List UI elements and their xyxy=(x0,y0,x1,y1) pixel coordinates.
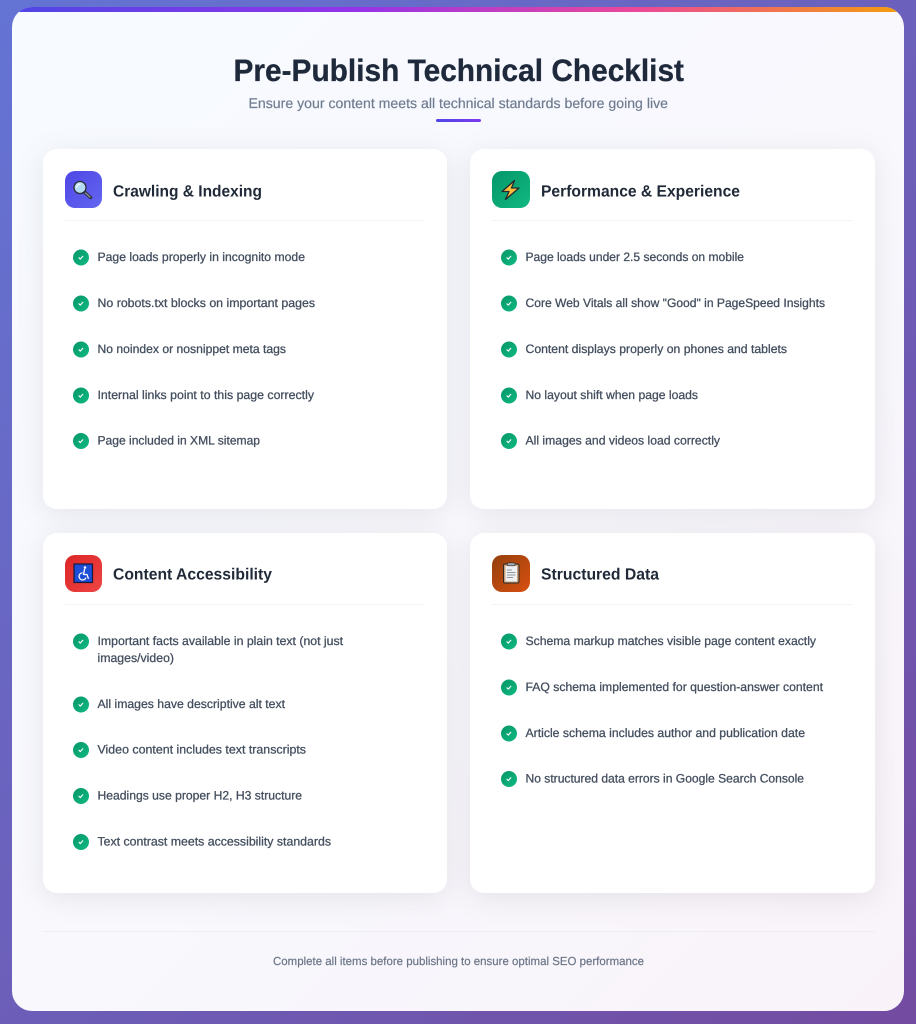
checklist item: All images and videos load correctly xyxy=(526,434,721,448)
panel: structured data xyxy=(470,533,875,893)
checklist item: Video content includes text transcripts xyxy=(98,742,306,756)
subtitle: Ensure your content meets all technical standards before going live xyxy=(248,95,668,111)
checklist item: Schema markup matches visible page content exactly xyxy=(526,634,817,648)
title: Pre-Publish Technical Checklist xyxy=(234,53,684,88)
checklist item: Important facts available in plain text (not just xyxy=(98,634,344,648)
heading: structured data: Structured Data xyxy=(541,566,660,584)
checklist item: Article schema includes author and publication date xyxy=(526,726,805,740)
heading: content accessibility: Content Accessibility xyxy=(113,566,272,584)
icon: lightning bolt xyxy=(492,171,530,208)
checklist item: images/video) xyxy=(98,651,174,665)
checklist item: No robots.txt blocks on important pages xyxy=(98,296,315,310)
panel: content accessibility xyxy=(43,533,447,893)
title underline xyxy=(436,119,481,122)
checklist item: Content displays properly on phones and tablets xyxy=(526,342,787,356)
checklist item: Core Web Vitals all show "Good" in PageSpeed Insights xyxy=(526,296,825,310)
icon: wheelchair symbol xyxy=(65,555,102,592)
checklist item: No noindex or nosnippet meta tags xyxy=(98,342,286,356)
checklist item: No layout shift when page loads xyxy=(526,388,698,402)
panel: crawling and indexing xyxy=(43,149,447,509)
checklist item: Internal links point to this page correctly xyxy=(98,388,315,402)
footer note: Complete all items before publishing to ensure optimal SEO performance xyxy=(273,955,644,968)
checklist item: Headings use proper H2, H3 structure xyxy=(98,788,302,802)
checklist item xyxy=(73,634,344,665)
icon: clipboard xyxy=(492,555,530,592)
top gradient bar xyxy=(12,7,904,12)
checklist item: All images have descriptive alt text xyxy=(98,697,286,711)
checklist item: Text contrast meets accessibility standards xyxy=(98,834,331,848)
heading: crawling and indexing: Crawling & Indexing xyxy=(113,182,262,200)
checklist item: No structured data errors in Google Search Console xyxy=(526,772,804,786)
checklist item: FAQ schema implemented for question-answer content xyxy=(526,680,824,694)
panel: performance and experience xyxy=(470,149,875,509)
icon: magnifying glass xyxy=(65,171,102,208)
checklist item: Page included in XML sitemap xyxy=(98,434,260,448)
checklist item: Page loads under 2.5 seconds on mobile xyxy=(526,250,744,264)
heading: performance and experience: Performance & Experience xyxy=(541,182,740,200)
checklist item: Page loads properly in incognito mode xyxy=(98,250,305,264)
